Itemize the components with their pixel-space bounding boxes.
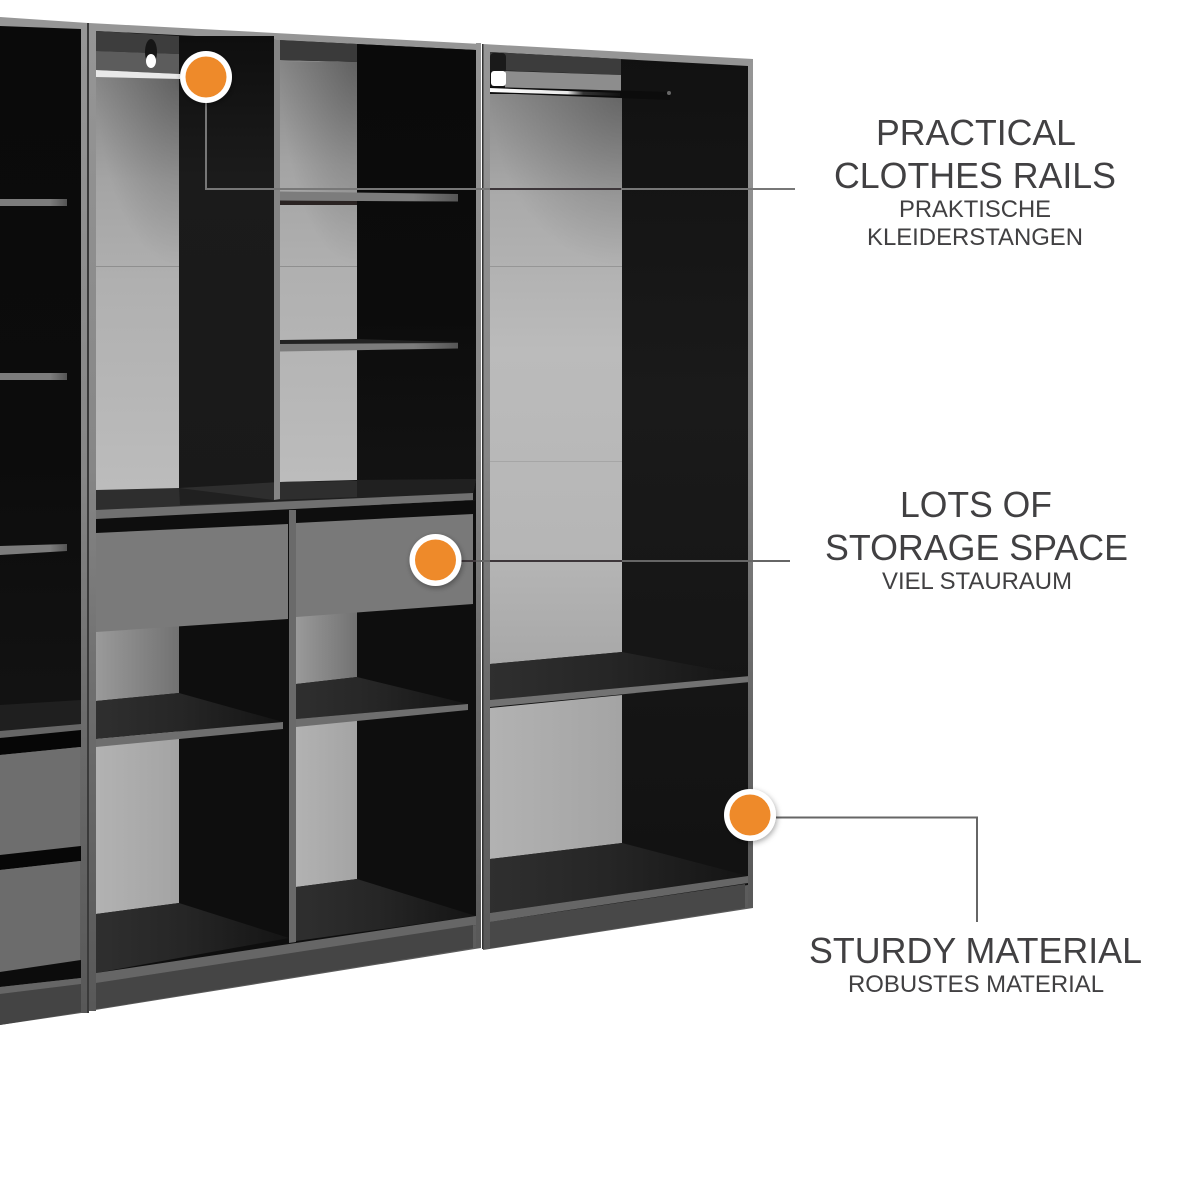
bottom rail and plinth [96,916,476,1009]
text: sturdy material [809,930,1142,998]
text: lots of storage space: VIEL STAURAUM [882,568,1072,595]
upper left back panel [96,76,179,491]
lower left shelf [96,693,283,747]
lower right shelf [296,677,468,727]
lower back panel [490,695,622,859]
marker: clothes rails [180,51,232,103]
dark side column left [179,36,274,501]
upper left rail [96,70,180,79]
upper right back panel [280,40,357,482]
upper back panel [490,94,622,664]
left cabinet [0,17,89,1025]
callout line: storage space [461,560,790,562]
bottom floors [96,879,476,973]
header and hook [490,52,621,92]
shelf two [280,339,458,352]
wardrobe illustration [0,17,753,1025]
lower centre divider [289,510,296,943]
upper left header and hook [96,31,179,74]
middle cabinet [89,23,481,1011]
shelf [490,652,750,707]
text: lots of storage space: LOTS OF [900,484,1052,525]
rail and plinth [485,876,748,949]
text: practical clothes rails: PRAKTISCHE [899,196,1051,223]
marker: storage space [410,534,462,586]
text: practical clothes rails: CLOTHES RAILS [834,155,1116,196]
clothes rail [489,87,671,100]
vertical divider upper [274,40,280,500]
upper floor [96,479,476,511]
text: practical clothes rails [834,112,1116,251]
right cabinet [482,44,753,950]
text: practical clothes rails: KLEIDERSTANGEN [867,224,1083,251]
dark side column right [357,44,476,490]
middle rail [96,493,473,519]
lower right back panels [296,605,357,887]
callout line: sturdy material [776,818,977,922]
callout line: clothes rails [206,100,795,189]
lower left back panels [96,612,179,914]
text: sturdy material: ROBUSTES MATERIAL [848,971,1104,998]
text: lots of storage space: STORAGE SPACE [825,527,1128,568]
text: lots of storage space [825,484,1128,595]
drawer left [96,524,288,632]
text: sturdy material: STURDY MATERIAL [809,930,1142,971]
left cabinet drawers [0,747,81,987]
text: practical clothes rails: PRACTICAL [876,112,1076,153]
floor [490,843,748,913]
drawer right [296,514,473,617]
shelf one [280,192,458,205]
marker: sturdy material [724,789,776,841]
